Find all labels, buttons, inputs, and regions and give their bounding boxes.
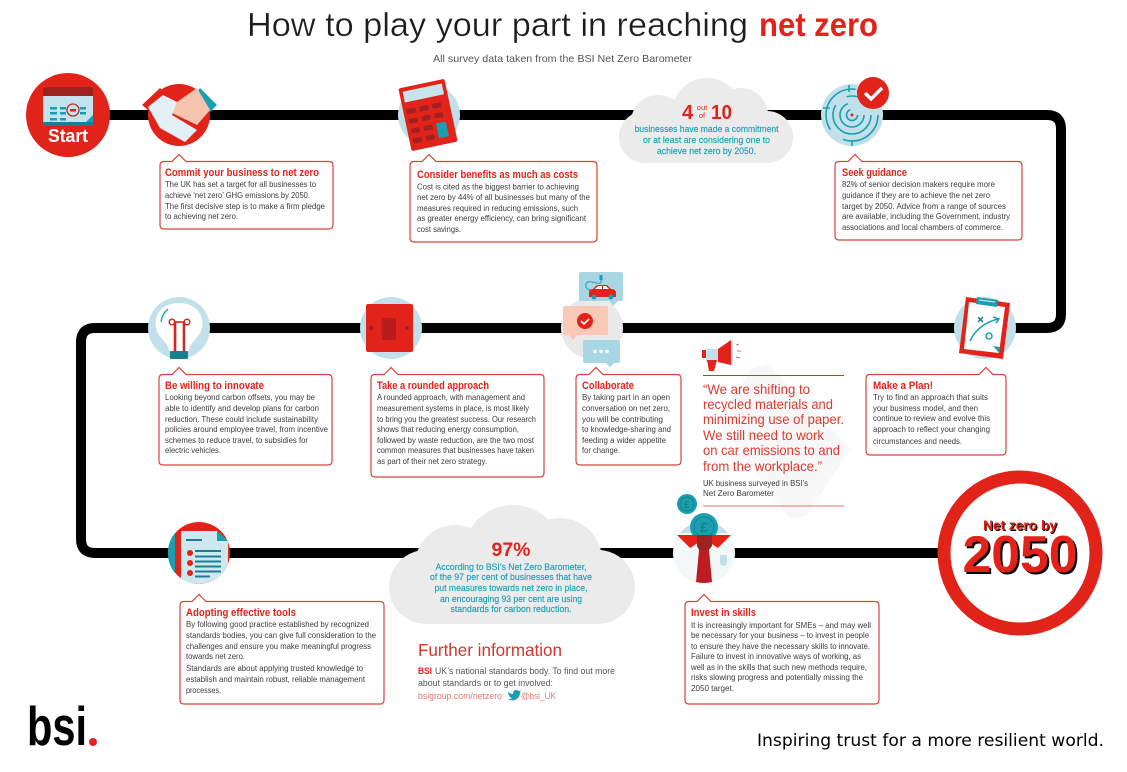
callout: innovate: policies around employee travel, from incentive	[165, 424, 328, 434]
callout: invest in skills: be necessary for your business – to invest in people	[691, 630, 869, 640]
further information: bsigroup.com/netzero	[418, 691, 502, 702]
callout: collaborate: for change.	[582, 445, 620, 455]
icon: invest in skills: £	[684, 500, 690, 511]
callout: collaborate: to knowledge-sharing and	[582, 424, 671, 434]
callout: commit	[160, 154, 333, 229]
callout: innovate: Looking beyond carbon offsets, you may be	[165, 392, 315, 402]
further information: BSI	[418, 666, 432, 677]
journey path line	[81, 115, 1061, 553]
callout: innovate: reduction. These could include sustainability	[165, 414, 319, 424]
callout: commit: Commit your business to net zero	[165, 167, 319, 179]
icon: switch	[360, 297, 422, 359]
callout: commit: The UK has set a target for all businesses to	[165, 179, 316, 189]
callout: rounded approach: to bring you the greatest success. Our research	[377, 414, 536, 424]
callout: rounded approach: followed by waste reduction, are the two most	[377, 435, 535, 445]
quote: minimizing use of paper.	[703, 411, 844, 427]
cloud: 4 out of 10: achieve net zero by 2050.	[657, 145, 756, 156]
callout: collaborate: Collaborate	[582, 380, 634, 392]
cloud: 97%: 97%	[492, 540, 531, 561]
callout: invest in skills: to ensure they have the necessary skills to innovate.	[691, 641, 870, 651]
callout: collaborate: conversation on net zero,	[582, 403, 670, 413]
callout: consider: measures required in reducing emissions, such	[417, 203, 578, 213]
callout: rounded approach	[371, 368, 544, 477]
icon: maze with check	[821, 77, 889, 146]
callout: consider: Cost is cited as the biggest barrier to achieving	[417, 182, 579, 192]
callout: rounded approach: A rounded approach, with management and	[377, 392, 525, 402]
callout: adopting tools: Adopting effective tools	[186, 607, 296, 619]
callout: adopting tools: towards net zero.	[186, 651, 245, 661]
callout: seek guidance	[835, 154, 1022, 240]
callout: consider: net zero by 44% of all businesses but many of the	[417, 192, 590, 202]
cloud: 4 out of 10: businesses have made a commitment	[634, 123, 779, 134]
icon: checklist document	[168, 522, 230, 584]
callout: innovate: Be willing to innovate	[165, 380, 264, 392]
finish badge: net zero by 2050: 2050	[962, 526, 1078, 584]
quote: “We are shifting to	[703, 381, 810, 397]
callout: seek guidance: associations and local chambers of commerce.	[842, 222, 1003, 232]
callout: make a plan: approach to reflect your changing	[873, 424, 990, 434]
callout: commit: to achieving net zero.	[165, 211, 238, 221]
cloud: 4 out of 10	[619, 78, 793, 163]
icon: calculator	[398, 79, 460, 151]
callout: make a plan: your business model, and then	[873, 403, 978, 413]
quote: recycled materials and	[703, 396, 833, 412]
callout: invest in skills: Invest in skills	[691, 607, 756, 619]
callout: adopting tools: processes.	[186, 685, 221, 695]
callout: consider: as greater energy efficiency, can bring significant	[417, 213, 587, 223]
callout: collaborate: By taking part in an open	[582, 392, 670, 402]
callout: make a plan: circumstances and needs.	[873, 436, 962, 446]
finish badge: net zero by 2050: 2050	[964, 528, 1080, 586]
callout: consider: Consider benefits as much as costs	[417, 169, 578, 181]
callout: innovate: able to identify and develop plans for carbon	[165, 403, 319, 413]
callout: make a plan: Make a Plan!	[873, 380, 933, 392]
cloud: 97%: standards for carbon reduction.	[450, 603, 572, 614]
further information: Further information	[418, 640, 562, 660]
callout: make a plan	[866, 368, 1006, 455]
cloud: 4 out of 10: of	[699, 111, 706, 120]
quote: Net Zero Barometer	[703, 488, 774, 498]
quote: We still need to work	[703, 427, 825, 443]
finish badge: net zero by 2050: Net zero by	[984, 518, 1058, 534]
further information: UK’s national standards body. To find out more	[435, 666, 615, 677]
callout: collaborate: you will be contributing	[582, 414, 663, 424]
callout: seek guidance: guidance if they are to achieve the net zero	[842, 190, 990, 200]
further information	[418, 640, 615, 702]
cloud: 97%	[389, 505, 635, 624]
cloud: 97%: put measures towards net zero in place,	[434, 582, 588, 593]
callout: seek guidance: 82% of senior decision makers require more	[842, 179, 995, 189]
callout: commit: achieve ‘net zero’ GHG emissions by 2050.	[165, 190, 310, 200]
callout: consider: cost savings.	[417, 224, 461, 234]
icon: invest in skills: £	[700, 519, 708, 535]
callout: innovate: electric vehicles.	[165, 445, 221, 455]
cloud: 4 out of 10: 4	[682, 102, 694, 124]
callout: consider	[410, 154, 597, 242]
further information: @bsi_UK	[521, 691, 557, 702]
callout: innovate	[159, 368, 332, 465]
callout: adopting tools	[180, 594, 384, 704]
callout: commit: The first decisive step is to make a firm pledge	[165, 201, 325, 211]
callout: invest in skills: well as in the skills that such new methods require,	[690, 662, 867, 672]
callout: innovate: schemes to reduce travel, to subsidies for	[165, 435, 308, 445]
subtitle: All survey data taken from the BSI Net Zero Barometer	[433, 53, 692, 65]
quote: from the workplace.”	[703, 458, 822, 474]
callout: collaborate	[576, 368, 681, 465]
icon: start calendar: Start	[48, 126, 88, 146]
callout: adopting tools: challenges and ensure you make meaningful progress	[186, 641, 371, 651]
icon: start calendar	[26, 73, 110, 157]
callout: adopting tools: By following good practice established by recognized	[186, 619, 369, 629]
cloud: 97%: of the 97 per cent of businesses that have	[430, 571, 592, 582]
icon: invest in skills	[673, 494, 735, 584]
title: How to play your part in reaching	[247, 6, 748, 43]
finish badge: net zero by 2050	[944, 477, 1096, 629]
cloud: 97%: According to BSI’s Net Zero Barometer,	[436, 561, 586, 572]
tagline: Inspiring trust for a more resilient world.	[757, 731, 1104, 751]
icon: megaphone	[702, 340, 741, 371]
callout: rounded approach: Take a rounded approach	[377, 380, 489, 392]
quote	[703, 375, 844, 506]
further information: about standards or to get involved:	[418, 678, 553, 689]
icon: clipboard plan	[954, 297, 1016, 359]
icon: collaborate speech bubbles	[561, 272, 623, 367]
callout: rounded approach: measurement systems in place, is most likely	[377, 403, 530, 413]
icon: handshake	[142, 84, 217, 146]
callout: rounded approach: shows that reducing energy consumption,	[377, 424, 519, 434]
background shape behind quote	[716, 364, 850, 518]
callout: invest in skills: risks slowing progress and potentially missing the	[691, 672, 863, 682]
quote: UK business surveyed in BSI’s	[703, 478, 808, 488]
callout: collaborate: feeding a wider appetite	[582, 435, 666, 445]
icon: light bulb	[148, 297, 210, 359]
callout: invest in skills: It is increasingly important for SMEs – and may well	[691, 620, 871, 630]
cloud: 4 out of 10: or at least are considering one to	[643, 134, 770, 145]
callout: adopting tools: standards bodies, you can give full consideration to the	[186, 630, 376, 640]
callout: invest in skills: Failure to invest in innovative ways of working, as	[691, 651, 861, 661]
callout: rounded approach: common measures that businesses have taken	[377, 445, 534, 455]
callout: invest in skills	[685, 594, 879, 704]
callout: rounded approach: as part of their net zero strategy.	[377, 456, 487, 466]
finish badge: net zero by 2050: Net zero by	[983, 517, 1057, 533]
callout: seek guidance: target by 2050. Advice from a range of sources	[842, 201, 1006, 211]
title: net zero	[759, 6, 878, 43]
callout: adopting tools: Standards are about applying trusted knowledge to	[186, 663, 363, 673]
cloud: 97%: an encouraging 93 per cent are using	[440, 593, 582, 604]
cloud: 4 out of 10: out	[697, 103, 708, 112]
callout: invest in skills: 2050 target.	[691, 683, 734, 693]
cloud: 4 out of 10: 10	[711, 102, 732, 124]
callout: make a plan: continue to review and evolve this	[873, 413, 990, 423]
quote: on car emissions to and	[703, 442, 840, 458]
callout: adopting tools: establish and maintain robust, reliable management	[186, 674, 366, 684]
callout: seek guidance: Seek guidance	[842, 167, 907, 179]
logo: bsi: bsi	[27, 695, 87, 757]
callout: seek guidance: are available, including the Government, industry	[842, 211, 1011, 221]
callout: make a plan: Try to find an approach that suits	[873, 392, 988, 402]
